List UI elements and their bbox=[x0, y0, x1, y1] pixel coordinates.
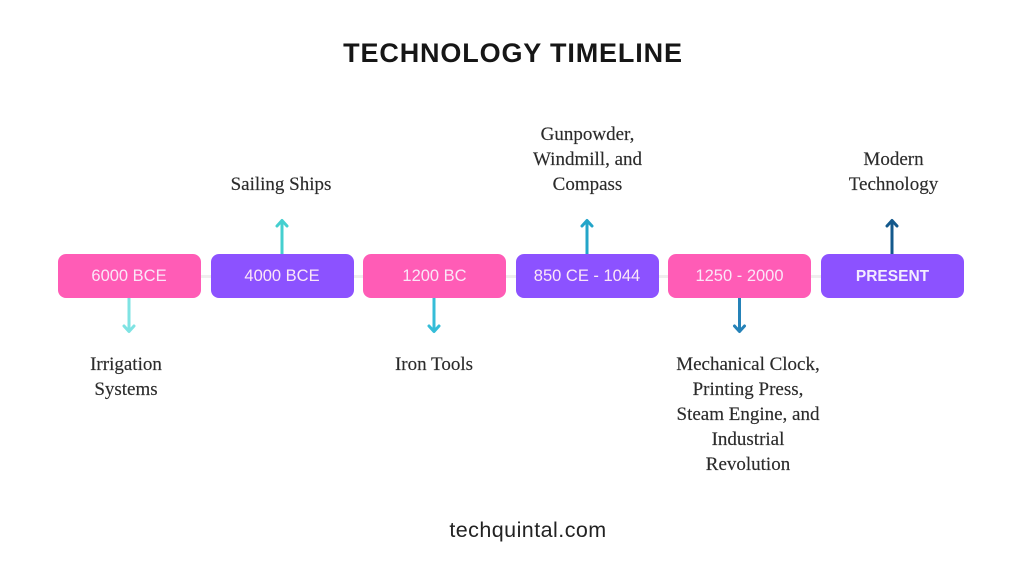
label: gunpowder, windmill, compass: Windmill, and bbox=[533, 149, 642, 170]
label: modern technology bbox=[849, 149, 938, 195]
label: iron tools: Iron Tools bbox=[395, 354, 473, 375]
label: irrigation systems bbox=[90, 354, 162, 400]
date box: present: PRESENT bbox=[856, 268, 929, 285]
label: irrigation systems: Systems bbox=[94, 379, 158, 400]
date box: 850 CE - 1044 bbox=[516, 254, 658, 298]
date box: 4000 BCE bbox=[210, 254, 354, 298]
date box: 1200 BC bbox=[363, 254, 506, 298]
label: gunpowder, windmill, compass bbox=[532, 124, 642, 195]
footer website: techquintal.com bbox=[449, 518, 607, 542]
label: sailing ships: Sailing Ships bbox=[231, 174, 331, 195]
label: gunpowder, windmill, compass: Compass bbox=[553, 174, 622, 195]
label: modern technology: Technology bbox=[849, 174, 938, 195]
date box: 6000 BCE: 6000 BCE bbox=[91, 267, 167, 285]
timeline connector line bbox=[200, 275, 821, 278]
label: mechanical clock etc: Printing Press, bbox=[693, 379, 803, 400]
date box: 850 CE - 1044: 850 CE - 1044 bbox=[534, 267, 640, 285]
label: mechanical clock etc: Mechanical Clock, bbox=[676, 354, 820, 375]
label: mechanical clock etc bbox=[676, 354, 820, 475]
date box: 1250 - 2000: 1250 - 2000 bbox=[695, 267, 784, 285]
date box: 1200 BC: 1200 BC bbox=[402, 267, 467, 285]
date box: present bbox=[821, 254, 964, 298]
label: mechanical clock etc: Steam Engine, and bbox=[676, 404, 820, 425]
label: modern technology: Modern bbox=[863, 149, 924, 170]
date box: 6000 BCE bbox=[58, 254, 200, 298]
label: mechanical clock etc: Industrial bbox=[712, 429, 784, 450]
title: TECHNOLOGY TIMELINE bbox=[343, 38, 683, 68]
label: gunpowder, windmill, compass: Gunpowder, bbox=[541, 124, 634, 145]
label: irrigation systems: Irrigation bbox=[90, 354, 162, 375]
date box: 4000 BCE: 4000 BCE bbox=[244, 267, 320, 285]
label: mechanical clock etc: Revolution bbox=[706, 454, 790, 475]
date box: 1250 - 2000 bbox=[668, 254, 811, 298]
